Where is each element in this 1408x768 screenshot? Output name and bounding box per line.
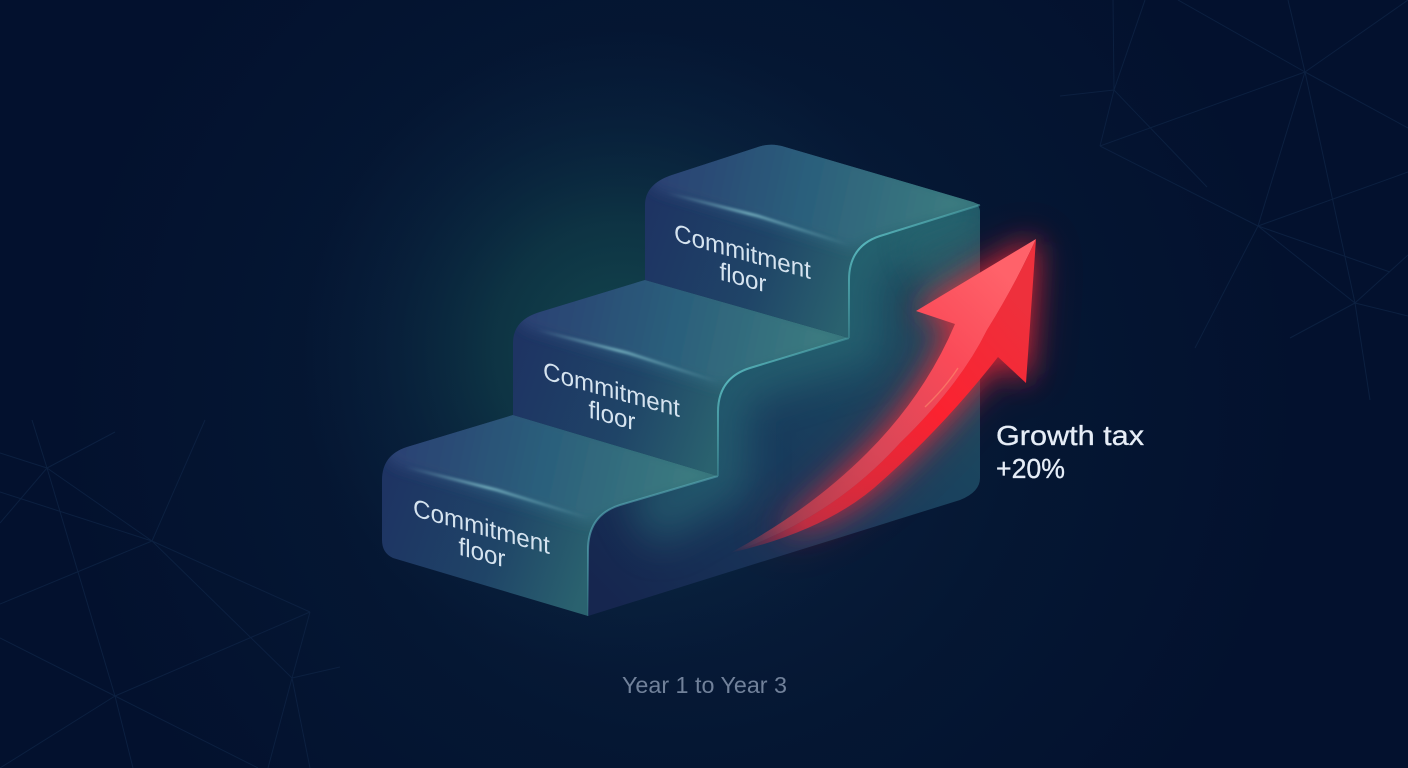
callout: growth tax [996, 420, 1144, 484]
step 2 [513, 280, 848, 476]
arrow crease highlight [925, 368, 958, 407]
callout: growth tax: Growth tax [996, 420, 1144, 451]
step 3 lit edge [849, 205, 980, 338]
staircase side face [588, 202, 980, 616]
arrow dark facet [730, 239, 1036, 553]
step 2 label: Commitment [543, 357, 680, 423]
step 1 riser [382, 415, 716, 616]
arrow light facet [730, 239, 1036, 553]
step 3 label: floor [720, 257, 766, 299]
step 3 tread [652, 144, 980, 247]
step 1 edge highlight [414, 469, 574, 514]
step 3 riser [645, 144, 980, 338]
step 1 tread [388, 415, 716, 522]
arrow wide glow [760, 239, 1036, 540]
polygon mesh: bottom left [0, 420, 340, 768]
step 3 [645, 144, 980, 338]
step 2 edge highlight [546, 332, 704, 378]
step 2 label: floor [589, 395, 635, 437]
step 1 label: floor [459, 532, 505, 574]
side face teal glow [640, 205, 985, 520]
callout: growth tax: +20% [996, 453, 1065, 484]
step 1 lit edge [588, 476, 718, 616]
arrow glow [780, 239, 1036, 530]
step 3 edge highlight [676, 195, 835, 240]
step 2 riser [513, 311, 848, 476]
step 2 lit edge [718, 338, 849, 476]
staircase [370, 130, 997, 620]
step 3 label: Commitment [674, 219, 811, 285]
timeline caption: Year 1 to Year 3 [622, 672, 787, 698]
polygon mesh: top right [1060, 0, 1408, 400]
growth arrow [730, 239, 1036, 553]
step 1 [382, 415, 718, 616]
step 2 tread [520, 280, 848, 385]
step 1 label: Commitment [413, 494, 550, 560]
